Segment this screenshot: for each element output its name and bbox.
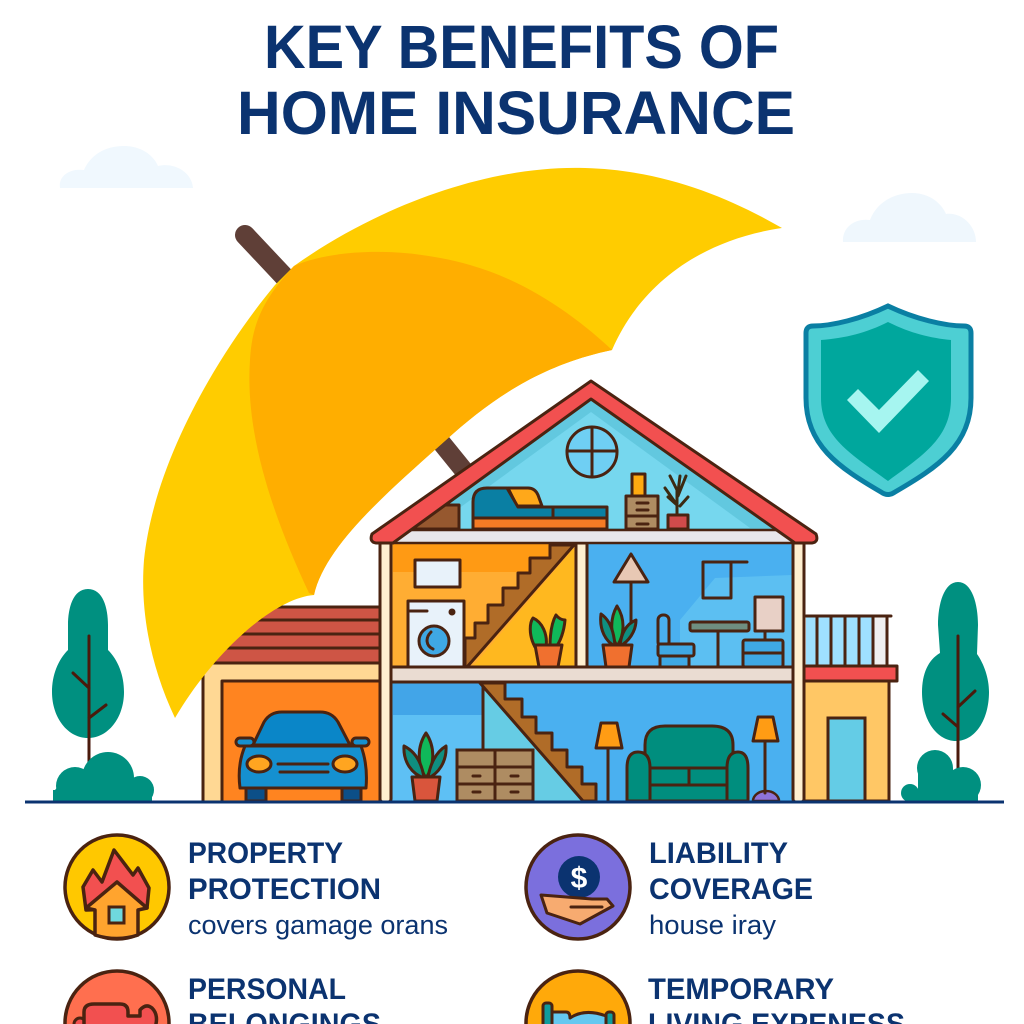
upper right room — [587, 543, 794, 667]
garage door — [222, 681, 380, 802]
benefit: temporary living expenses — [526, 971, 905, 1024]
description: house iray — [649, 910, 777, 940]
lower cord — [482, 687, 484, 750]
right house post — [793, 541, 804, 802]
triangle floor lamp — [614, 554, 648, 625]
annex wall — [804, 681, 889, 801]
icon: bed — [526, 971, 630, 1024]
annex — [804, 616, 897, 801]
middle floor slab — [391, 667, 794, 682]
ground line — [25, 800, 1004, 804]
annex door — [828, 718, 865, 801]
description: covers gamage orans — [188, 910, 448, 940]
shield with check — [806, 306, 971, 494]
upper staircase — [465, 545, 574, 667]
floor lamp left — [596, 723, 622, 801]
left tree — [52, 589, 124, 772]
balcony railing — [806, 616, 891, 666]
umbrella handle top — [245, 235, 292, 285]
wall frame — [703, 562, 747, 598]
icon: hand with coin: $ — [571, 862, 588, 895]
upper left plant — [530, 615, 565, 667]
balcony deck — [804, 666, 897, 681]
table lamp and drawers — [743, 597, 783, 667]
upper right plant — [601, 606, 636, 667]
lower plant — [404, 733, 446, 801]
wall picture — [415, 560, 460, 587]
heading — [648, 973, 905, 1024]
cabinet — [457, 750, 533, 801]
washing machine — [408, 601, 464, 667]
garage wall — [203, 663, 381, 802]
heading: COVERAGE — [649, 873, 813, 906]
attic floor beam — [391, 530, 794, 543]
title: HOME INSURANCE — [237, 79, 795, 147]
right tree — [922, 582, 989, 768]
heading: PERSONAL — [188, 973, 346, 1006]
attic bed — [473, 488, 607, 529]
title: KEY BENEFITS OF — [264, 13, 779, 81]
heading — [188, 837, 381, 906]
benefit: liability coverage — [526, 835, 813, 940]
heading: PROTECTION — [188, 873, 381, 906]
heading: PROPERTY — [188, 837, 343, 870]
cloud right — [843, 193, 976, 242]
table — [690, 622, 749, 667]
house — [371, 381, 817, 802]
heading: TEMPORARY — [648, 973, 834, 1006]
cloud left — [60, 146, 193, 188]
upper floor centre post — [576, 543, 587, 667]
title — [237, 13, 795, 147]
sofa — [627, 726, 748, 801]
icon: hand with coin — [526, 835, 630, 939]
attic nightstand — [626, 474, 658, 529]
floor lamp right — [753, 717, 779, 801]
heading — [188, 973, 381, 1024]
icon: house on fire — [65, 835, 169, 939]
umbrella canopy — [143, 168, 782, 718]
lower staircase — [480, 683, 596, 801]
attic plant — [665, 476, 688, 529]
round attic window — [567, 427, 617, 477]
garage — [203, 607, 381, 802]
garage roof — [205, 607, 381, 663]
left house post — [380, 541, 391, 802]
lower floor room — [391, 682, 794, 802]
benefit: property protection — [65, 835, 448, 940]
left bush — [53, 752, 154, 805]
benefit: personal belongings — [65, 971, 381, 1024]
upper left room — [391, 543, 577, 667]
main roof — [371, 381, 817, 543]
right bush — [901, 750, 981, 803]
chair — [658, 615, 694, 667]
icon: belongings — [65, 971, 169, 1024]
car — [236, 712, 369, 801]
heading: LIABILITY — [649, 837, 788, 870]
heading — [649, 837, 813, 906]
attic — [386, 399, 796, 531]
umbrella handle lower — [436, 436, 470, 478]
